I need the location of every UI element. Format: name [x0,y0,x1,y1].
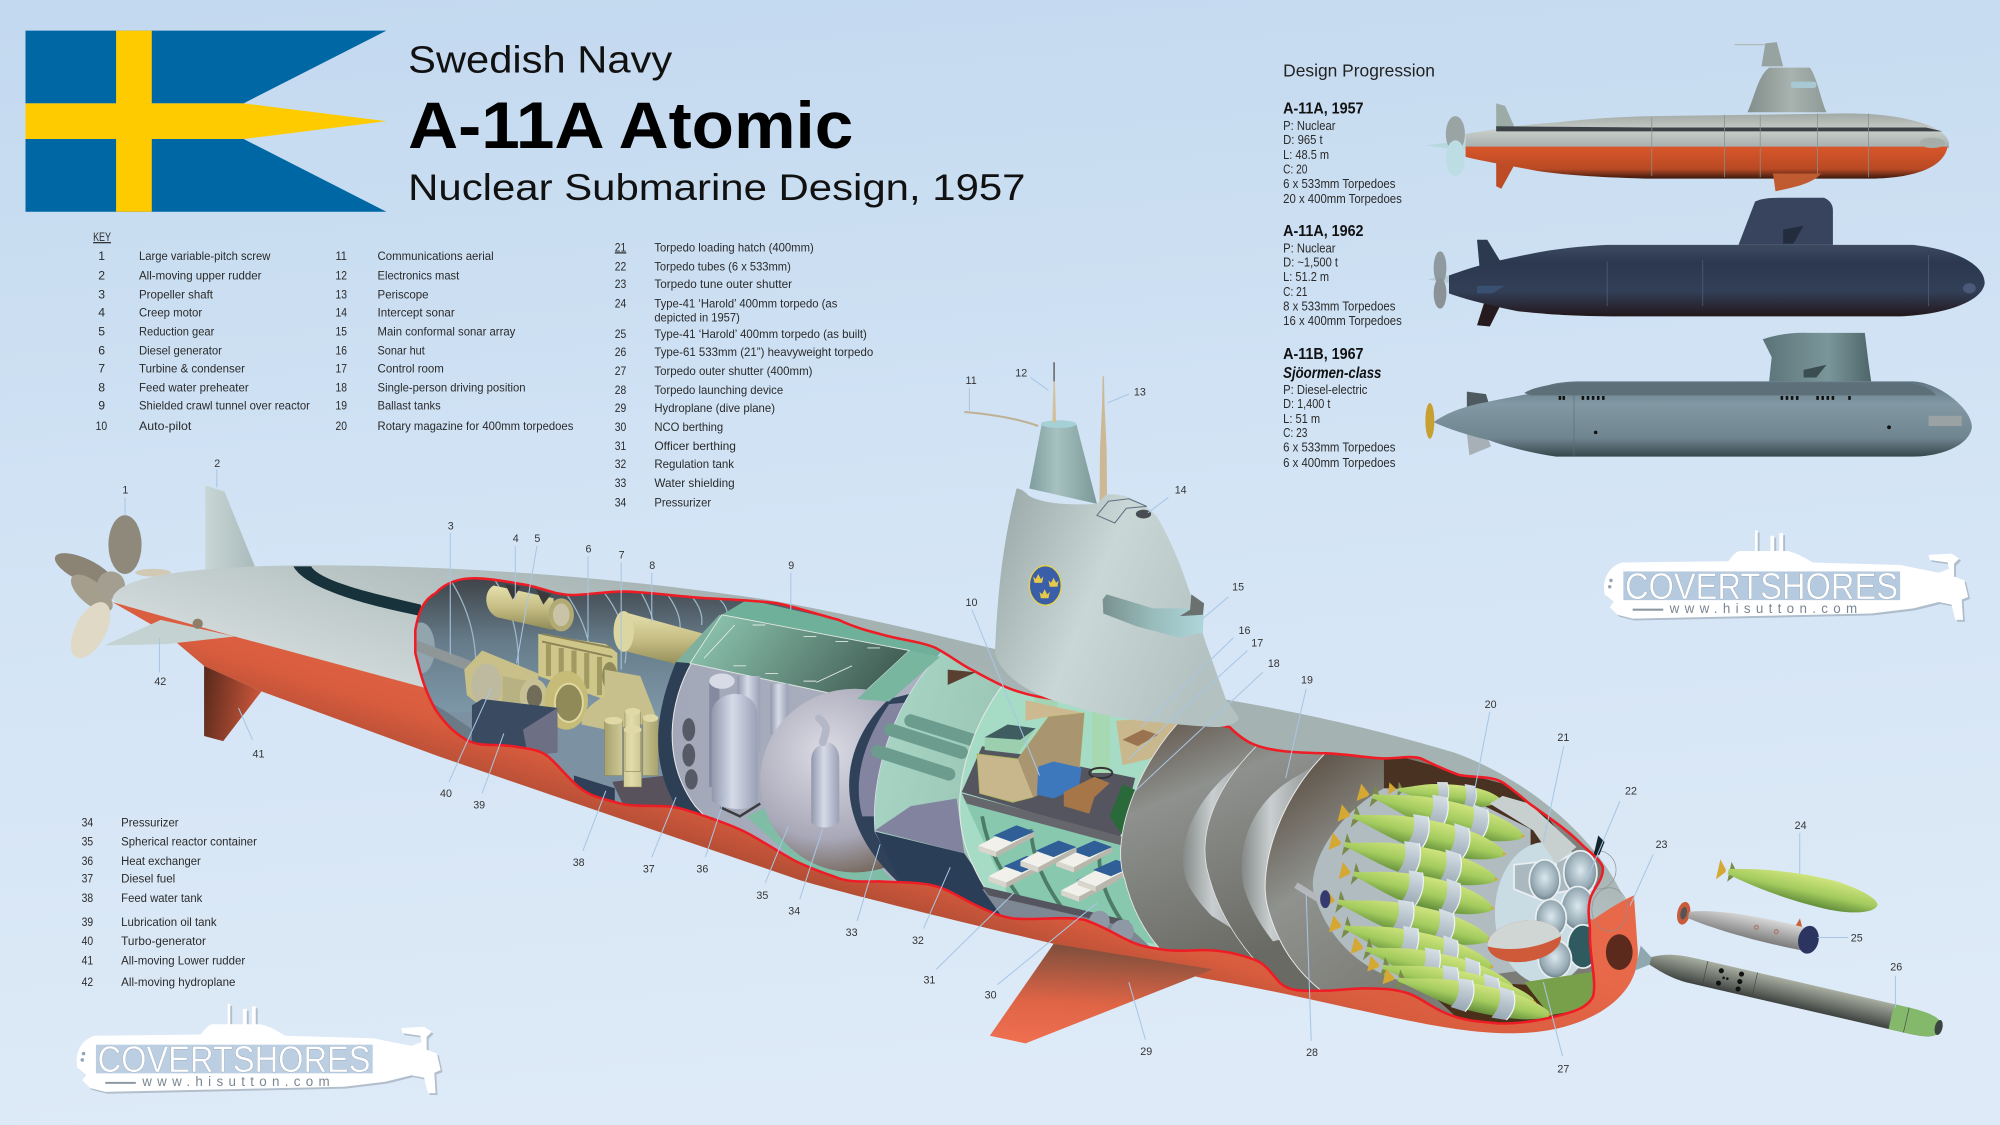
callout numbers: 35 [756,890,768,902]
regulation tank lower [875,832,1000,914]
callout numbers [122,367,1902,1076]
key column 1: 7 [98,361,105,375]
panel: design progression text: C: 23 [1283,425,1307,440]
callout numbers: 19 [1301,675,1313,687]
torpedo tubes [1514,851,1598,978]
callout numbers: 40 [440,788,452,800]
key column 3: Hydroplane (dive plane) [654,401,775,415]
regulation tank compartment [874,652,1002,866]
key column 2: Periscope [378,287,429,301]
key column 4, lower left: 35 [82,835,93,849]
intercept sonar panel [1097,499,1147,523]
panel: design progression text: A-11A, 1962 [1283,222,1364,240]
hull red lower [112,602,1638,1033]
key column 1: Propeller shaft [139,287,214,301]
callout numbers: 16 [1239,625,1250,637]
torpedo room bulkhead [1264,754,1602,1015]
callout numbers: 23 [1656,839,1668,851]
key column 4, lower left: 37 [82,872,93,886]
sail [964,362,1239,727]
key column 4, lower left: 34 [82,816,93,830]
key column 2: 15 [335,324,347,338]
frame ring 1 highlight [1183,764,1240,928]
key column 2: Rotary magazine for 400mm torpedoes [378,419,573,433]
key column 3: Regulation tank [654,457,735,471]
callout numbers: 8 [649,560,655,572]
intercept sonar [1136,510,1151,518]
callout numbers: 25 [1851,932,1863,944]
title: Nuclear Submarine Design, 1957 [408,167,1026,208]
magazine disc [1313,788,1531,982]
key column 3: 31 [615,439,626,453]
callout numbers: 6 [585,543,591,555]
key column 4, lower left: 42 [82,975,93,989]
key column 1: Turbine & condenser [139,361,245,375]
dark bulkhead top [1384,758,1555,846]
panel: design progression text: P: Nuclear [1283,241,1336,256]
panel: design progression text: A-11A, 1957 [1283,100,1364,118]
callout numbers: 34 [788,906,800,918]
callout leader lines [125,378,1895,1056]
panel: design progression text: L: 51.2 m [1283,269,1329,284]
key column 4, lower left: Lubrication oil tank [121,915,217,929]
hull [112,565,1638,1033]
cutaway interior [416,580,1602,1022]
sail body [995,489,1239,727]
key column 3: Torpedo tubes (6 x 533mm) [654,259,791,273]
aft machinery space [416,580,822,806]
callout numbers: 26 [1890,962,1902,974]
main cutaway submarine [50,362,1658,1125]
callout numbers: 28 [1306,1047,1318,1059]
key column 3: 30 [615,420,626,434]
panel: design progression text: A-11B, 1967 [1283,345,1364,363]
panel: design progression text: Design Progression [1283,61,1435,81]
callout numbers: 20 [1485,699,1497,711]
feed water preheater [614,611,704,667]
dive plane [990,944,1213,1043]
callout numbers: 41 [253,749,265,761]
key column 2: Electronics mast [378,268,460,282]
sonar band upper lip [1180,594,1204,616]
key column 2: 13 [335,287,347,301]
reduction gear and turbo-generator [464,651,588,730]
callout numbers: 29 [1140,1046,1152,1058]
key column 3: Pressurizer [654,495,711,509]
callout numbers: 42 [154,676,166,688]
brown wedge [948,670,976,685]
cut outline [415,578,1603,1023]
regulation tank [875,798,964,853]
flag: Swedish naval ensign [26,31,386,212]
launching device [1296,885,1330,908]
torpedo 24 [1715,855,1881,920]
key column 4, lower left: 36 [82,854,93,868]
panel: design progression text: L: 51 m [1283,411,1320,426]
rotary magazine torpedoes [1320,775,1556,1031]
callout numbers: 39 [473,800,485,812]
panel: design progression text: C: 21 [1283,284,1307,299]
key column 3: 26 [615,345,626,359]
callout numbers: 5 [534,533,540,545]
callout numbers: 13 [1134,386,1146,398]
pressurizer [811,718,839,827]
key column 1 [93,230,310,433]
key column 4, lower left: 39 [82,915,93,929]
callout numbers: 4 [513,533,519,545]
key column 1: 6 [98,344,105,358]
callout numbers: 9 [788,560,794,572]
panel: design progression text: P: Nuclear [1283,118,1336,133]
key column 4, lower left: Spherical reactor container [121,835,257,849]
key column 3: Torpedo outer shutter (400mm) [654,364,812,378]
periscope [1099,376,1107,504]
panel: design progression text: D: ~1,500 t [1283,255,1338,270]
key column 1: Feed water preheater [139,381,249,395]
logo: Covert Shores, right: COVERTSHORES [1625,566,1898,607]
callout numbers: 31 [923,974,935,986]
emblem: three crowns [1029,566,1061,605]
callout numbers: 37 [643,863,655,875]
key column 3: Torpedo loading hatch (400mm) [654,240,814,254]
key column 3: 27 [615,364,626,378]
logo: Covert Shores, right: www.hisutton.com [1669,601,1857,616]
key column 1: 10 [96,419,107,433]
conformal sonar band [1103,594,1204,638]
key column 4, lower left: Turbo-generator [121,934,206,948]
key column 3: 28 [615,383,626,397]
callout numbers: 24 [1795,820,1807,832]
creep motor [486,584,574,631]
callout numbers: 14 [1175,485,1187,497]
frame ring 1 [1120,724,1256,958]
panel: design progression text: D: 1,400 t [1283,396,1331,411]
key column 3: Torpedo tune outer shutter [654,277,792,291]
key column 2: Main conformal sonar array [378,324,516,338]
torpedo 25 [1675,893,1822,956]
purple inner ring [858,702,904,816]
dark bulkhead bottom [1438,984,1566,1022]
key column 1: All-moving upper rudder [139,268,261,282]
callout numbers: 33 [846,927,858,939]
callout numbers: 21 [1557,732,1569,744]
callout numbers: 7 [619,550,625,562]
key column 4, lower left: 38 [82,891,93,905]
key column 1: Diesel generator [139,344,222,358]
profile: A-11B 1967 Sjoormen [1425,333,1972,457]
panel: design progression text: 20 x 400mm Torpedoes [1283,191,1402,206]
frame ring 2 highlight [1242,765,1314,941]
logo: Covert Shores, left: www.hisutton.com [141,1074,330,1089]
key column 4, lower left: Heat exchanger [121,854,201,868]
key column 1: 5 [98,324,105,338]
callout numbers: 18 [1268,658,1280,670]
profile: A-11A 1962 [1427,198,1985,327]
callout numbers: 17 [1251,638,1263,650]
propeller [50,515,171,664]
key column 2: Sonar hut [378,344,425,358]
key column 4, lower left: Feed water tank [121,891,203,905]
panel: design progression text: C: 20 [1283,161,1307,176]
key column 3: 23 [615,277,626,291]
key column 3: Officer berthing [654,439,736,453]
panel: design progression text: 6 x 400mm Torpedoes [1283,455,1396,470]
key column 2: Single-person driving position [378,381,526,395]
key column 2 [335,249,573,433]
callout numbers: 10 [966,597,978,609]
key column 3: depicted in 1957) [654,310,740,324]
panel: design progression text: D: 965 t [1283,132,1323,147]
key column 3: NCO berthing [654,420,723,434]
key column 2: 18 [335,381,347,395]
key column 3 [615,240,873,509]
key column 3: Type-41 ‘Harold’ 400mm torpedo (as built) [654,327,867,341]
panel: design progression text [1283,61,1435,470]
ballast cylinders [878,721,972,774]
black nose stripe [1593,835,1605,857]
key column 4, lower left [82,816,257,989]
key column 2: 12 [335,268,347,282]
key column 2: 14 [335,305,347,319]
mast fairing [1029,422,1097,504]
key column 1: Large variable-pitch screw [139,249,271,263]
key column 1: KEY [93,230,111,244]
nose shutter outlines [1580,851,1628,931]
heat exchanger [709,673,788,816]
key column 1: Reduction gear [139,324,214,338]
control room bulkhead [959,686,1158,948]
key column 1: 3 [98,287,105,301]
key column 2: 16 [335,344,347,358]
key column 3: Type-61 533mm (21”) heavyweight torpedo [654,345,873,359]
key column 3: 22 [615,259,626,273]
stern hydroplane [105,620,235,645]
callout numbers: 15 [1232,582,1244,594]
key column 4, lower left: 41 [82,953,93,967]
title: A-11A Atomic [408,89,853,163]
key column 1: 4 [98,305,105,319]
key column 4, lower left: Diesel fuel [121,872,175,886]
panel: design progression text: 6 x 533mm Torpedoes [1283,440,1396,455]
callout numbers: 32 [912,935,924,947]
hull stripe [293,566,421,616]
key column 1: 2 [98,268,105,282]
key column 4, lower left: All-moving hydroplane [121,975,236,989]
callout numbers: 22 [1625,786,1637,798]
green tube extents [1524,972,1594,1015]
turbine and condenser [582,670,658,787]
logo: Covert Shores, left: COVERTSHORES [98,1039,371,1080]
shielded crawl tunnel [676,602,941,693]
key column 3: Water shielding [654,476,735,490]
key column 4, lower left: All-moving Lower rudder [121,953,245,967]
key column 3: 25 [615,327,626,341]
panel: design progression text: P: Diesel-electric [1283,382,1368,397]
callout numbers: 11 [966,375,977,387]
key column 3: 34 [615,495,626,509]
lower rudder [204,657,261,741]
aerial [964,412,1038,426]
torpedo outer shutter [1485,916,1564,967]
key column 1: 1 [98,249,105,263]
control room [962,689,1180,838]
key column 3: 33 [615,476,626,490]
mast tip [1053,362,1055,381]
logo: Covert Shores, right [1604,531,1970,622]
teal floor [746,808,892,880]
electronics mast [1052,380,1056,422]
key column 3: 29 [615,401,626,415]
upper rudder [205,485,256,570]
torpedo 26 [1635,946,1945,1041]
callout numbers: 3 [448,520,454,532]
reactor sphere [760,688,884,872]
key column 1: 9 [98,398,105,412]
key column 2: Intercept sonar [378,305,455,319]
callout numbers: 38 [573,857,585,869]
key column 2: 20 [335,419,347,433]
key column 2: 17 [335,361,347,375]
callout numbers: 27 [1557,1064,1569,1076]
key column 3: 21 [615,240,626,254]
key column 2: Communications aerial [378,249,494,263]
profile: A-11A 1957 [1425,42,1949,191]
key column 2: 19 [335,398,347,412]
logo: Covert Shores, left [77,1004,443,1095]
reactor bulkhead [672,650,927,881]
water shielding ring [849,694,909,881]
nose torpedo shutter hole [1606,934,1633,970]
key column 1: Auto-pilot [139,419,192,433]
key column 3: 24 [615,296,626,310]
callout numbers: 30 [985,990,997,1002]
diesel generator [538,634,617,704]
key column 3: Torpedo launching device [654,383,783,397]
teal frame [857,651,940,702]
key column 1: Shielded crawl tunnel over reactor [139,398,310,412]
bulkhead ports [682,718,698,790]
hatch 21 [1490,796,1577,864]
key column 2: 11 [335,249,347,263]
title [408,39,1026,208]
key column 2: Control room [378,361,444,375]
key column 4, lower left: 40 [82,934,93,948]
panel: design progression text: 6 x 533mm Torpedoes [1283,176,1396,191]
callout numbers: 1 [122,485,128,497]
stern fitting [193,619,203,629]
panel: design progression text: Sjöormen-class [1283,364,1381,382]
key column 1: Creep motor [139,305,202,319]
torpedo tube bulkhead [1495,842,1597,985]
oil tank side [523,708,557,756]
key column 4, lower left: Pressurizer [121,816,179,830]
key column 2: Ballast tanks [378,398,441,412]
callout numbers: 2 [214,458,220,470]
key column 1: 8 [98,381,105,395]
berthing compartments [962,793,1161,957]
panel: design progression text: 16 x 400mm Torpedoes [1283,313,1402,328]
title: Swedish Navy [408,39,673,82]
frame ring 2 [1204,746,1256,958]
mast top [1041,420,1077,428]
callout numbers: 12 [1015,367,1027,379]
panel: design progression text: 8 x 533mm Torpedoes [1283,299,1396,314]
callout numbers: 36 [696,863,708,875]
panel: design progression text: L: 48.5 m [1283,147,1329,162]
key column 3: 32 [615,457,626,471]
lubrication oil tank [472,699,557,755]
key column 3: Type-41 ‘Harold’ 400mm torpedo (as [654,296,837,310]
diesel fuel ring [658,662,702,814]
